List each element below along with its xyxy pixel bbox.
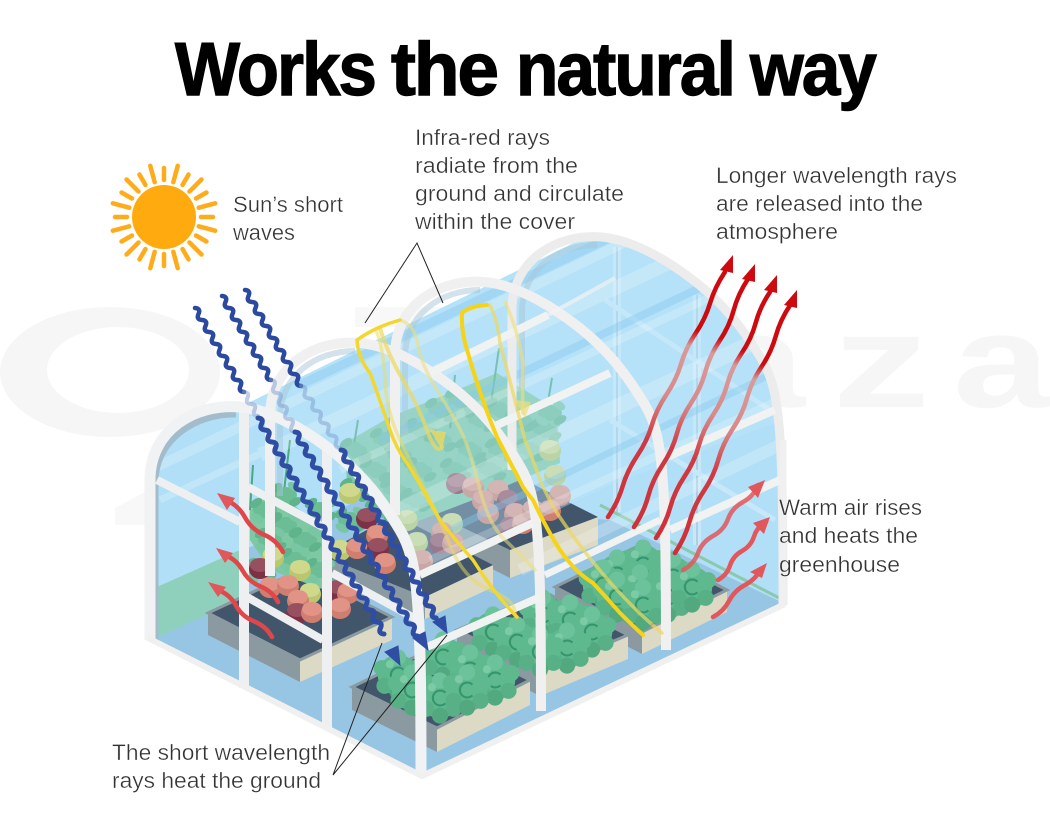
label: warm air: and heats the (779, 523, 918, 548)
watermark (0, 288, 1050, 525)
bed: tomato bed middle (320, 515, 493, 619)
title: natural (516, 27, 734, 111)
bed: tomato bed back (415, 470, 598, 578)
glass cover with reflections (158, 241, 776, 576)
watermark: Pl (545, 288, 700, 436)
greenhouse interior background (150, 235, 783, 775)
label: warm air (779, 495, 922, 577)
rays: sun's short waves (195, 290, 447, 665)
foliage: tomato vines (243, 348, 568, 590)
label: warm air: Warm air rises (779, 495, 922, 520)
bed: tomato bed front (208, 570, 392, 682)
label: infra-red rays: Infra-red rays (415, 125, 550, 150)
bed: lettuce bed back (555, 545, 727, 654)
title: Works (175, 27, 375, 111)
watermark: z (832, 288, 930, 436)
rays: longer wavelength (red) (608, 255, 797, 553)
frame: third arch (395, 282, 666, 650)
label: short wavelength rays (112, 740, 330, 793)
icon: sun (113, 166, 215, 268)
frame: longitudinal rails (420, 278, 780, 647)
frame: second arch (270, 343, 541, 711)
tomatoes (249, 440, 571, 624)
rays: infra-red (yellow) (357, 302, 662, 635)
watermark: a (705, 288, 806, 436)
rays: warm air (left) (208, 493, 283, 637)
title: way (749, 27, 877, 111)
callout lines: infra-red (365, 243, 443, 323)
label: longer wavelength rays: atmosphere (716, 219, 838, 244)
callout lines: short wavelength (333, 635, 447, 775)
label: infra-red rays: ground and circulate (415, 181, 624, 206)
back window frame (600, 247, 783, 600)
lettuces (374, 539, 716, 724)
green band: left window (157, 550, 240, 637)
label: warm air: greenhouse (779, 552, 900, 577)
label: short wavelength rays: The short wavelength (112, 740, 330, 765)
label: infra-red rays (414, 125, 624, 234)
bed: lettuce bed front (352, 640, 530, 752)
label: sun's short waves: waves (232, 220, 295, 245)
label: infra-red rays: within the cover (414, 209, 576, 234)
label: sun's short waves (232, 192, 344, 245)
label: sun's short waves: Sun’s short (233, 192, 344, 217)
frame: front end wall (150, 407, 421, 775)
label: longer wavelength rays: are released into the (716, 191, 923, 216)
frame: base edges (148, 440, 785, 776)
label: longer wavelength rays (716, 163, 957, 244)
floor (150, 500, 783, 775)
greenhouse illustration (148, 195, 790, 776)
title (175, 27, 877, 111)
label: longer wavelength rays: Longer wavelength rays (716, 163, 957, 188)
title: the (391, 27, 497, 111)
rays: warm air (right) (683, 480, 770, 617)
bed: lettuce bed middle (457, 592, 628, 696)
frame: back arch (512, 237, 783, 605)
label: short wavelength rays: rays heat the ground (112, 768, 321, 793)
label: infra-red rays: radiate from the (415, 153, 578, 178)
watermark: a (953, 288, 1050, 436)
